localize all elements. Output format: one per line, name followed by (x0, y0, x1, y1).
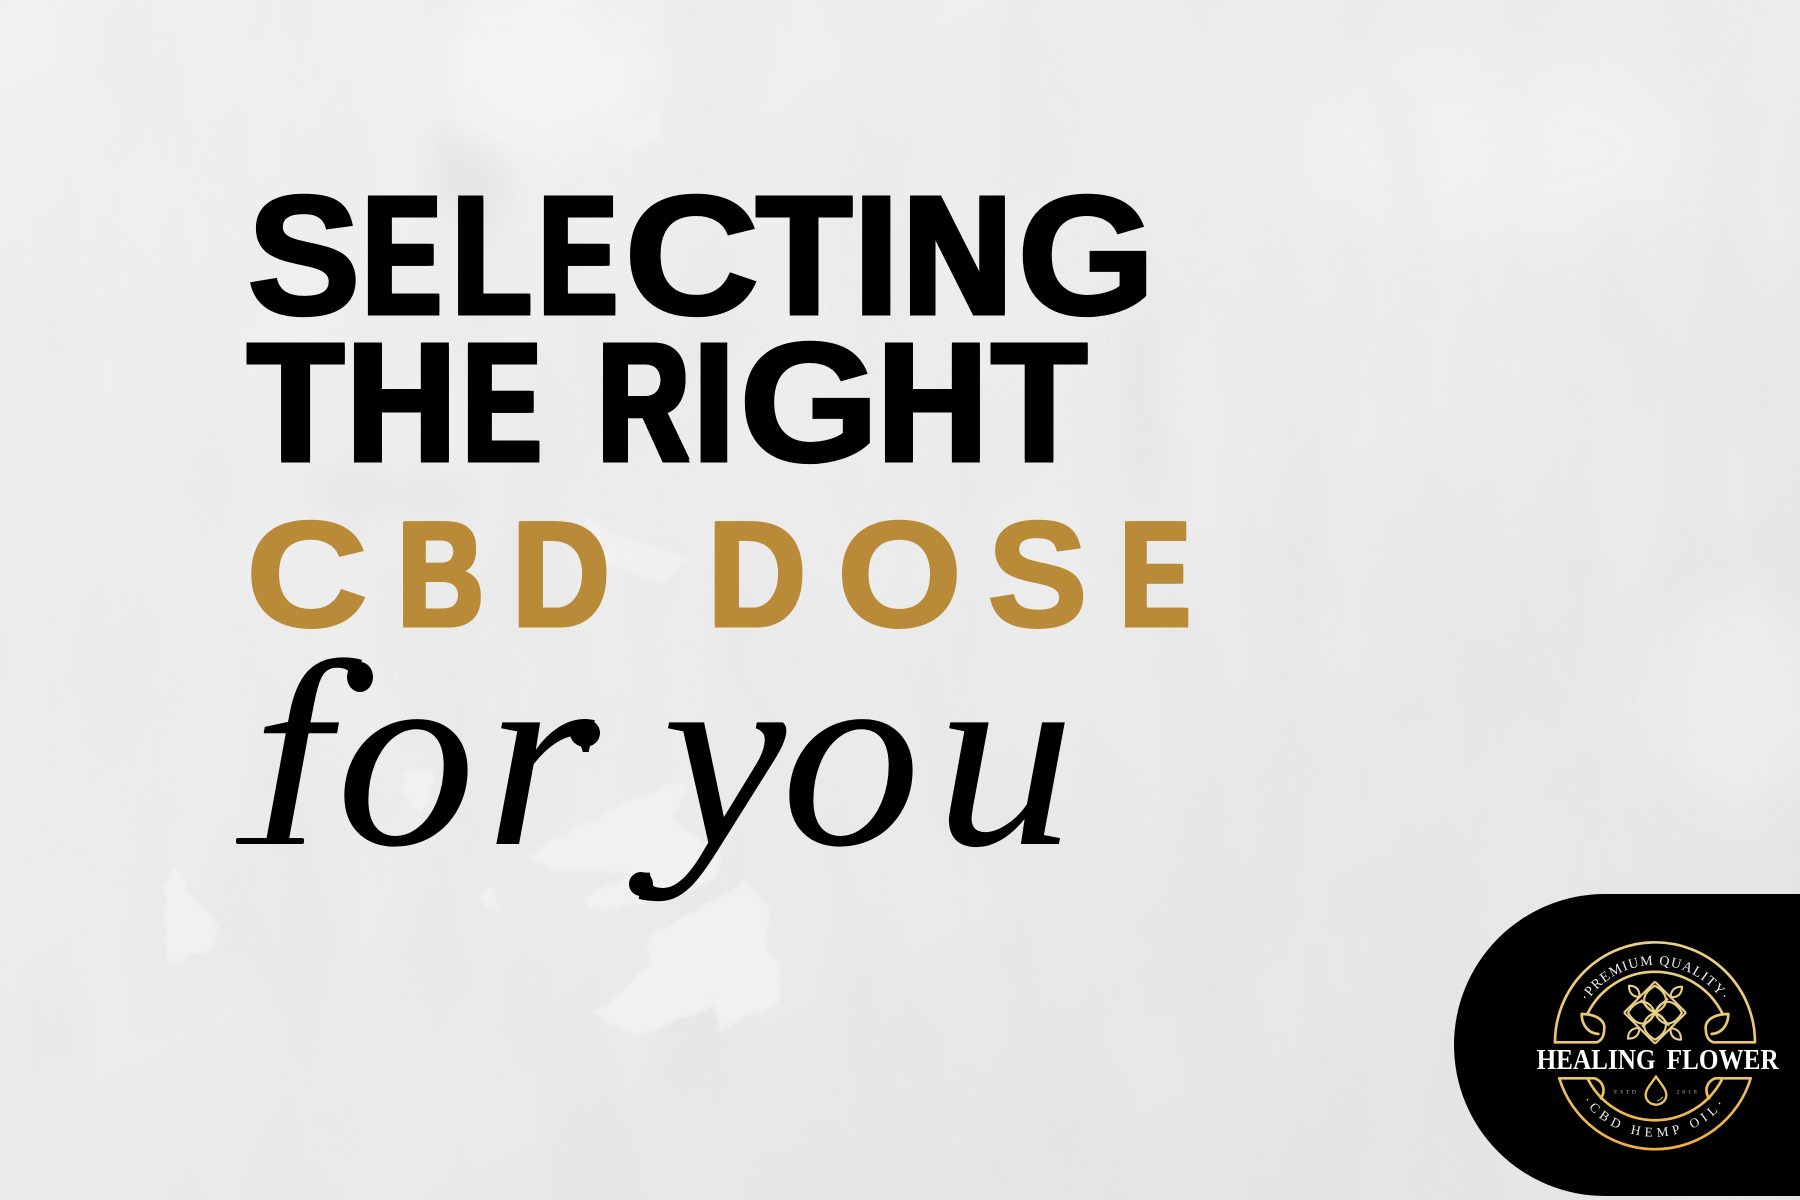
icon: flower (1624, 982, 1686, 1044)
title line: SELECTING: C (624, 161, 759, 351)
text: premium quality: ·PREMIUM QUALITY· (1584, 956, 1726, 998)
emblem lower ring (1559, 1078, 1751, 1149)
title line: SELECTING: G (1017, 161, 1156, 351)
title line: SELECTING: E (364, 161, 440, 351)
title line: CBD DOSE: D (512, 490, 610, 658)
logo emblem (1537, 941, 1779, 1150)
title line: SELECTING: L (453, 161, 531, 351)
title line: CBD DOSE: O (836, 490, 961, 658)
title line: THE RIGHT: H (878, 308, 987, 498)
title line: THE RIGHT: I (691, 308, 737, 498)
title line: SELECTING (247, 161, 1156, 351)
title line: CBD DOSE: S (988, 490, 1088, 658)
title line: SELECTING: T (757, 161, 851, 351)
icon: oil drop (1646, 1077, 1666, 1105)
text: CBD hemp oil: ·CBD HEMP OIL· (1586, 1099, 1720, 1137)
text: healing flower: HEALING (1537, 1044, 1656, 1075)
title line: SELECTING: N (903, 161, 1012, 351)
title line: CBD DOSE: B (398, 490, 483, 658)
title line: CBD DOSE: C (246, 490, 368, 658)
text: 2018: 2018 (1677, 1090, 1697, 1096)
title line: SELECTING: I (852, 161, 901, 351)
title line: THE RIGHT: R (598, 308, 689, 498)
title line: THE RIGHT: G (739, 308, 879, 498)
text: healing flower: FLOWER (1667, 1044, 1779, 1075)
title line: CBD DOSE: D (708, 490, 806, 658)
title line: SELECTING: E (540, 161, 616, 351)
text: estd: ESTD (1614, 1090, 1636, 1096)
emblem upper ring (1555, 942, 1755, 1042)
title line: CBD DOSE (246, 490, 1189, 658)
title line: THE RIGHT: E (464, 308, 540, 498)
title line: THE RIGHT: T (248, 308, 343, 498)
title line: for you: for you (252, 608, 1075, 902)
title line: THE RIGHT (246, 308, 1088, 498)
title line: CBD DOSE: E (1122, 490, 1189, 658)
title line: THE RIGHT: H (347, 308, 456, 498)
title line: SELECTING: S (247, 161, 361, 351)
title line: THE RIGHT: T (992, 308, 1086, 498)
